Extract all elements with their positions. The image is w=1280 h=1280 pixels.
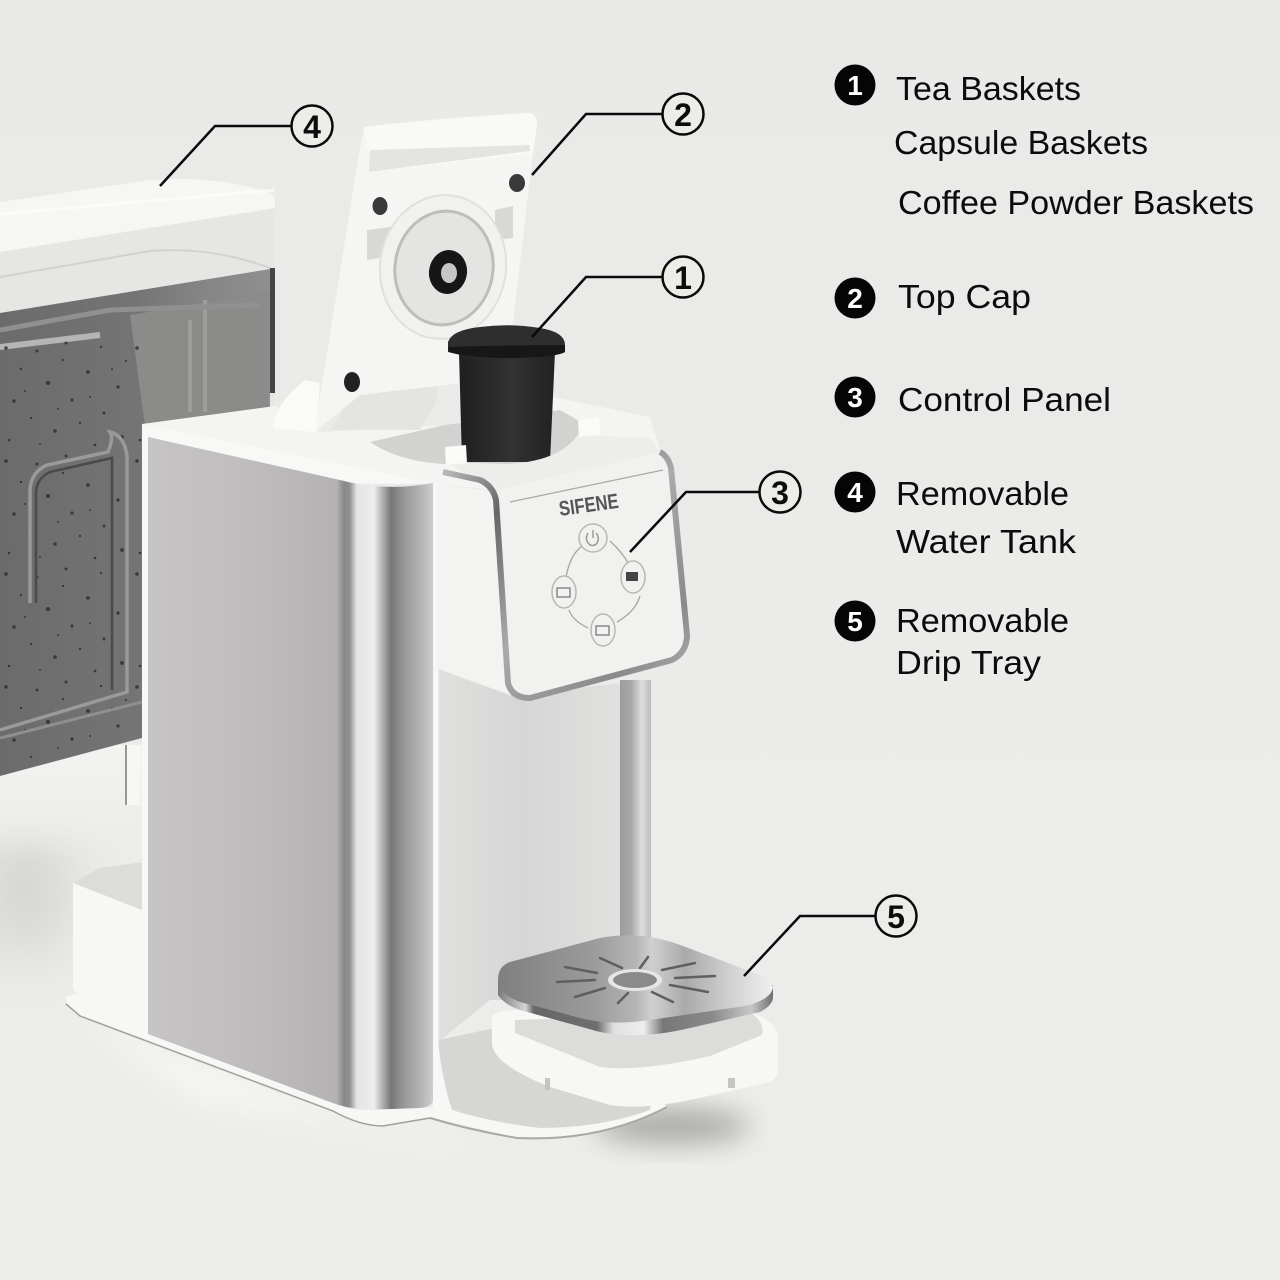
button 10oz bbox=[591, 614, 615, 646]
callout 1 bbox=[532, 256, 704, 337]
legend item 2: 2 bbox=[847, 283, 863, 314]
callout 5 bbox=[744, 896, 916, 976]
floor of cup stand bbox=[438, 1028, 660, 1128]
tank dark water region bbox=[0, 269, 270, 776]
callout 2: 2 bbox=[674, 97, 692, 133]
steel grate bbox=[498, 980, 773, 1035]
machine body bbox=[142, 397, 660, 1118]
legend item 1: Capsule Baskets bbox=[894, 125, 1148, 162]
legend item 4: Water Tank bbox=[896, 524, 1076, 561]
drip tray bbox=[492, 935, 778, 1107]
latches bbox=[367, 226, 398, 260]
callout 4: 4 bbox=[303, 109, 321, 145]
callout 4 bbox=[160, 106, 332, 186]
callout 3: 3 bbox=[771, 475, 789, 511]
callout 5: 5 bbox=[887, 899, 905, 935]
brand name: SIFENE bbox=[557, 490, 620, 521]
steel panel bbox=[148, 437, 433, 1110]
top cap bbox=[273, 113, 537, 432]
legend item 1: 1 bbox=[847, 70, 863, 101]
rear wall below dispenser bbox=[436, 668, 650, 1042]
rear reservoir bbox=[73, 862, 145, 1030]
legend item 1 bbox=[834, 64, 1254, 222]
capsule basket bbox=[448, 325, 565, 462]
hinge hook bbox=[273, 380, 320, 432]
legend item 1: Tea Baskets bbox=[896, 71, 1081, 108]
soft shadows on backdrop bbox=[0, 820, 750, 1145]
legend item 1: Coffee Powder Baskets bbox=[898, 185, 1254, 222]
legend item 4: 4 bbox=[847, 477, 863, 508]
legend item 5: 5 bbox=[847, 606, 863, 637]
callout 3 bbox=[630, 472, 800, 552]
callout 1: 1 bbox=[674, 260, 692, 296]
legend item 2 bbox=[834, 278, 1031, 318]
valve rings bbox=[371, 187, 515, 347]
button 6oz bbox=[552, 576, 576, 608]
legend item 5: Removable bbox=[896, 603, 1069, 640]
tabs bbox=[445, 445, 467, 465]
white column beside panel bbox=[436, 484, 510, 695]
cap face bbox=[316, 113, 537, 430]
legend item 3: Control Panel bbox=[898, 382, 1111, 419]
legend item 2: Top Cap bbox=[898, 279, 1031, 316]
legend item 4 bbox=[834, 472, 1076, 561]
legend item 3 bbox=[834, 376, 1111, 419]
legend item 4: Removable bbox=[896, 476, 1069, 513]
tank translucent upper body bbox=[0, 208, 275, 420]
legend item 5: Drip Tray bbox=[896, 645, 1041, 682]
callout 2 bbox=[532, 94, 704, 175]
power button bbox=[579, 524, 607, 552]
button 8oz bbox=[621, 561, 645, 593]
tank lid bbox=[0, 179, 275, 252]
handle outline bbox=[0, 432, 127, 730]
water tank bbox=[0, 179, 275, 860]
top face with opening cutout bbox=[445, 428, 660, 490]
legend item 3: 3 bbox=[847, 382, 863, 413]
speckles bbox=[0, 340, 142, 780]
support pole bbox=[620, 680, 651, 950]
legend item 5 bbox=[834, 600, 1069, 682]
base plate bbox=[66, 992, 667, 1138]
opening recess bbox=[370, 410, 595, 464]
control panel bbox=[443, 418, 687, 698]
glass strip bbox=[126, 745, 140, 805]
screw holes bbox=[372, 197, 388, 215]
button ring bbox=[566, 541, 640, 628]
top surface bbox=[142, 397, 660, 490]
